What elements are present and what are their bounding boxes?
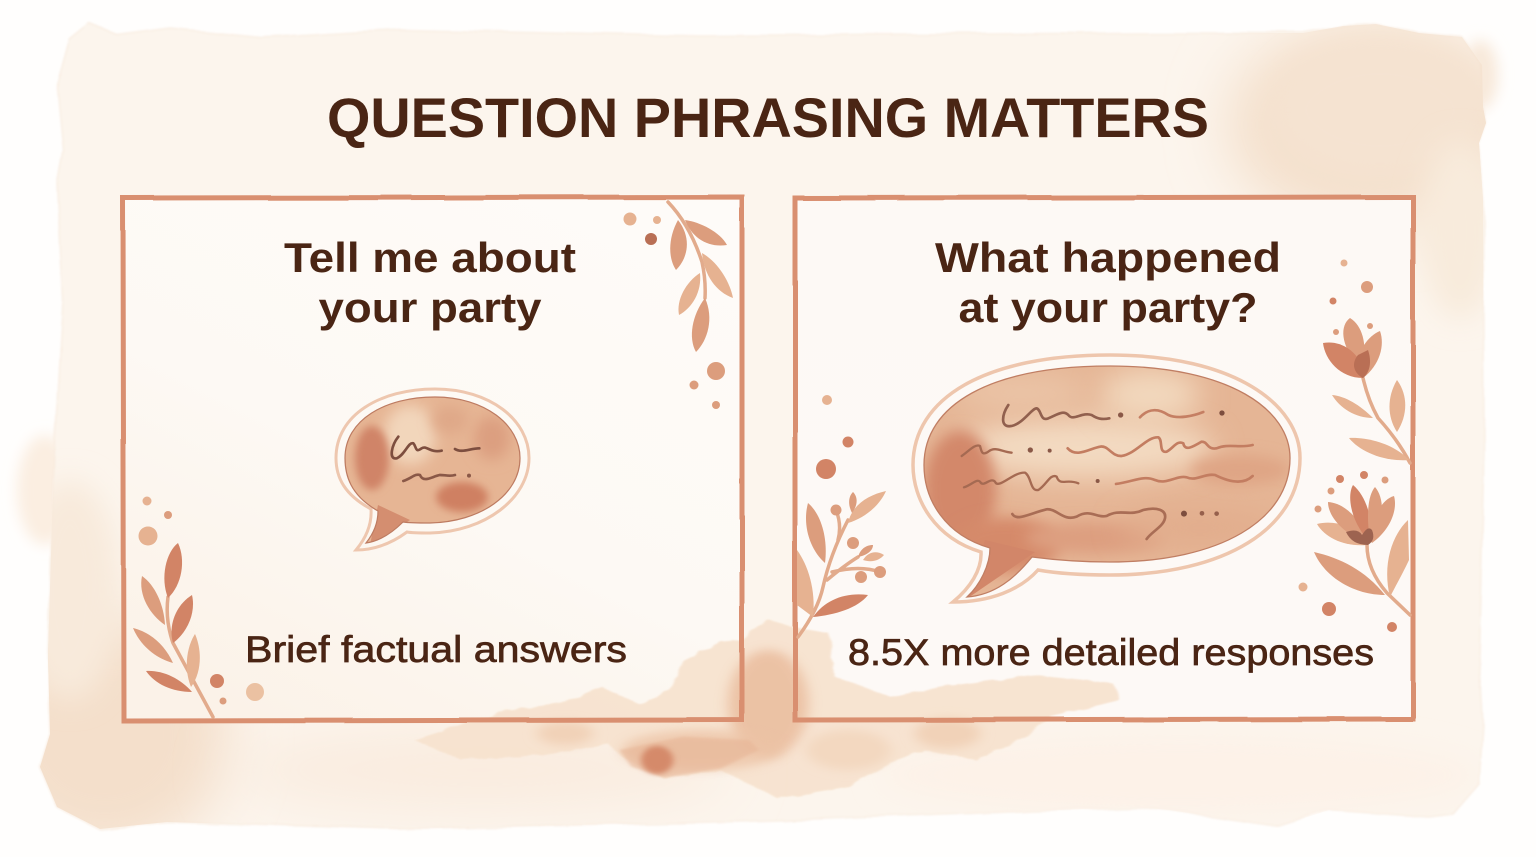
botanical: bottom left of left card — [133, 496, 264, 717]
botanical: left side of right card — [797, 395, 886, 637]
small bubble scribbles — [392, 437, 479, 481]
left card question: Tell me about — [284, 234, 576, 281]
small speech bubble — [336, 389, 529, 550]
botanical: top right of left card — [624, 202, 733, 409]
right card question: What happened — [935, 234, 1281, 281]
left card question: your party — [318, 284, 542, 331]
right card question — [935, 234, 1281, 331]
open flower — [1317, 485, 1395, 545]
tulip flower — [1323, 318, 1382, 378]
panel: left card frame — [123, 197, 742, 721]
right card caption: 8.5X more detailed responses — [848, 632, 1374, 673]
panel: left card background — [124, 199, 742, 720]
left card question — [284, 234, 576, 331]
right card question: at your party? — [958, 284, 1258, 331]
large speech bubble — [913, 355, 1300, 605]
large bubble scribbles — [962, 405, 1253, 539]
watercolor stain across the panels — [414, 620, 1120, 798]
botanical: right side flowers of right card — [1298, 260, 1410, 632]
panel: right card frame — [795, 197, 1413, 720]
left card caption: Brief factual answers — [245, 629, 627, 670]
title: QUESTION PHRASING MATTERS — [327, 86, 1209, 149]
panel: right card background — [796, 199, 1413, 720]
